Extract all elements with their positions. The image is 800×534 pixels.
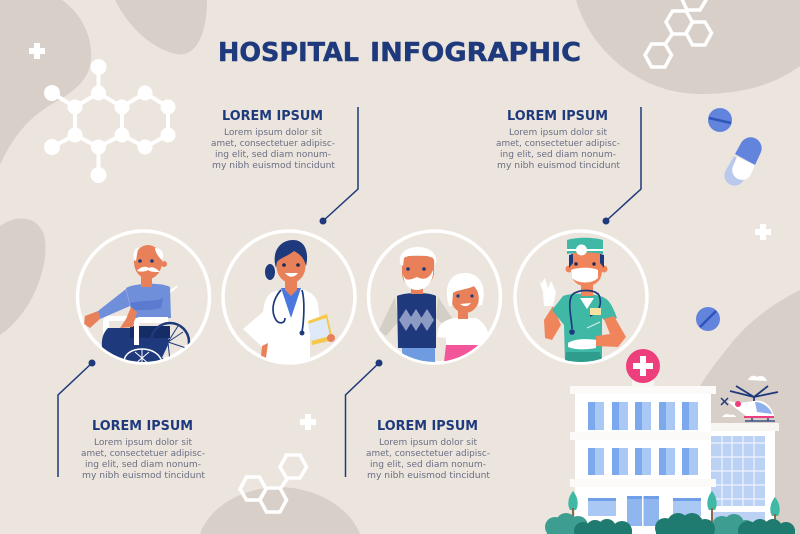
circle: nurse [515, 231, 647, 363]
title: HOSPITAL [218, 38, 359, 68]
text block: bottom middle: ing elit, sed diam nonum- [370, 460, 486, 470]
icon: plus right [755, 224, 771, 240]
icon: hexagons top right [645, 0, 712, 67]
circle: patient in wheelchair [78, 231, 210, 364]
text block: top right: my nibh euismod tincidunt [497, 161, 621, 171]
text block: bottom middle: Lorem ipsum dolor sit [379, 438, 478, 448]
connector: top left [320, 107, 358, 224]
connector: top right [602, 107, 641, 224]
icon: round pill lower [696, 307, 720, 331]
text block: top left [211, 108, 336, 171]
circle: elderly couple [368, 231, 500, 364]
icon: molecule [44, 59, 176, 183]
ground floor windows and door [588, 496, 701, 526]
trees and bushes [545, 491, 795, 534]
text block: top left: my nibh euismod tincidunt [212, 161, 336, 171]
hospital building [570, 349, 779, 534]
icon: round pill top [708, 108, 732, 132]
title: INFOGRAPHIC [370, 38, 581, 68]
text block: top right: Lorem ipsum dolor sit [509, 128, 608, 138]
text block: bottom left: amet, consectetuer adipisc- [81, 449, 205, 459]
connector: bottom left [58, 360, 96, 477]
text block: top left: ing elit, sed diam nonum- [215, 150, 331, 160]
text block: top right: amet, consectetuer adipisc- [496, 139, 620, 149]
text block: bottom middle: my nibh euismod tincidunt [367, 471, 491, 481]
title [218, 38, 581, 68]
icon: hospital sign [626, 349, 660, 387]
text block: bottom middle [366, 418, 491, 481]
windows upper floor [588, 402, 698, 430]
icon: plus top left [29, 43, 45, 59]
text block: bottom left: LOREM IPSUM [92, 418, 193, 434]
text block: bottom left: my nibh euismod tincidunt [82, 471, 206, 481]
icon: plus centre [300, 414, 316, 430]
icon: hexagons bottom [240, 455, 306, 512]
connector: bottom middle [346, 360, 382, 477]
text block: top right: ing elit, sed diam nonum- [500, 150, 616, 160]
main block [575, 392, 711, 534]
icon: capsule [724, 137, 762, 186]
wing [705, 423, 779, 534]
text block: bottom left [81, 418, 206, 481]
icon: helicopter [721, 376, 778, 421]
text block: bottom middle: amet, consectetuer adipisc- [366, 449, 490, 459]
text block: top left: amet, consectetuer adipisc- [211, 139, 335, 149]
text block: bottom left: ing elit, sed diam nonum- [85, 460, 201, 470]
circle: doctor [223, 231, 355, 363]
windows middle floor [588, 448, 698, 475]
text block: top left: LOREM IPSUM [222, 108, 323, 124]
text block: top right [496, 108, 621, 171]
text block: top left: Lorem ipsum dolor sit [224, 128, 323, 138]
text block: bottom left: Lorem ipsum dolor sit [94, 438, 193, 448]
text block: top right: LOREM IPSUM [507, 108, 608, 124]
text block: bottom middle: LOREM IPSUM [377, 418, 478, 434]
